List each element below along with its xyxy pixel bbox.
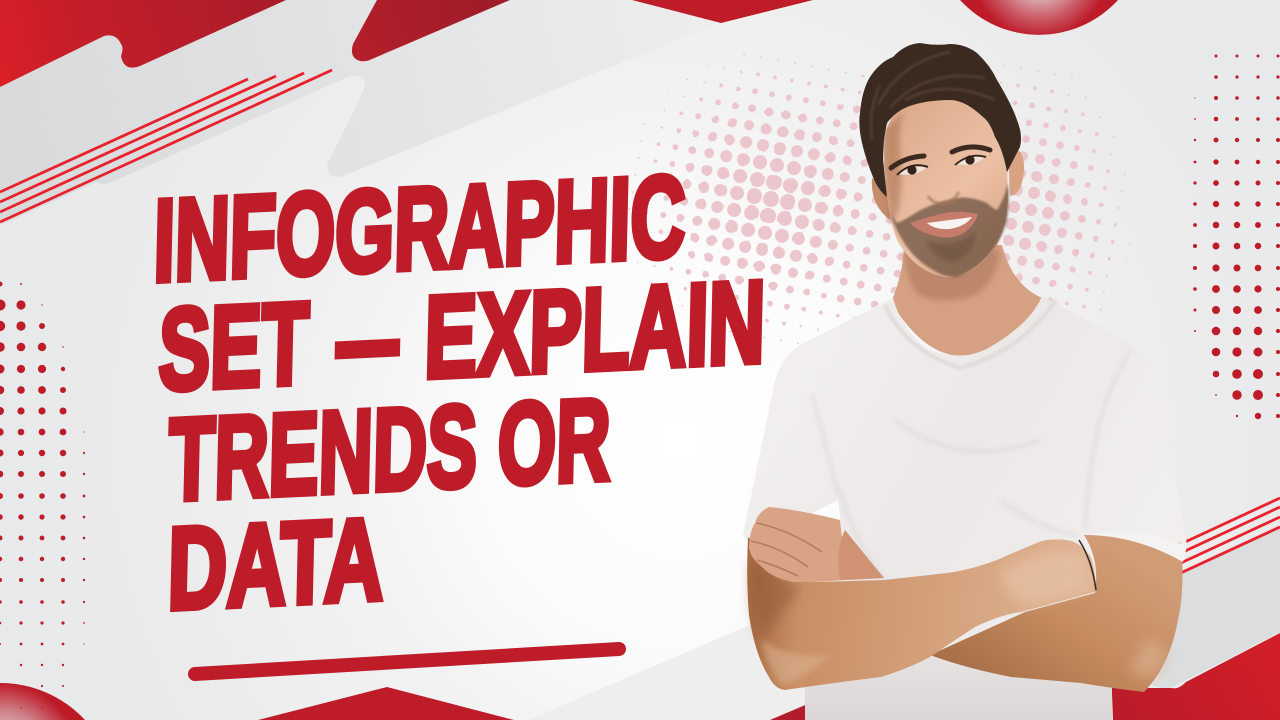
nose	[928, 192, 959, 204]
eyebrows	[891, 147, 990, 168]
chin stubble	[925, 232, 975, 262]
elbow shadow	[751, 560, 800, 640]
beard	[887, 183, 1009, 277]
title: EXPLAIN	[423, 256, 767, 402]
title: DATA	[166, 494, 385, 634]
title: —	[335, 274, 401, 407]
eyes	[897, 155, 986, 175]
background gray band bottom centre	[528, 625, 810, 720]
person: smiling man with crossed arms	[743, 43, 1187, 720]
red halftone dots right	[1193, 54, 1280, 419]
red chevron bottom centre	[258, 687, 514, 720]
face	[884, 92, 1008, 277]
red stripes bottom right	[1170, 498, 1280, 578]
title: TRENDS OR	[167, 374, 612, 525]
back arm	[930, 535, 1182, 692]
neck shadow	[904, 250, 1000, 300]
red sliver bottom	[770, 703, 810, 720]
red shape top-left	[0, 0, 286, 87]
t-shirt	[743, 296, 1187, 720]
pink halftone pattern behind person	[623, 51, 1133, 365]
background gray band bottom right	[1150, 525, 1280, 688]
title: INFOGRAPHIC	[152, 151, 687, 306]
red shape bottom right	[1100, 633, 1280, 720]
smile	[910, 212, 978, 238]
red stripes top-left	[0, 70, 332, 222]
red chevron top centre	[632, 0, 813, 23]
left elbow highlight	[762, 640, 830, 684]
title: SET	[157, 278, 310, 415]
red shape top centre-left	[352, 0, 510, 61]
arm contact shadow	[1079, 540, 1096, 590]
back elbow highlight	[1130, 640, 1166, 676]
right sleeve cuff	[1085, 532, 1187, 562]
hair	[859, 43, 1021, 197]
title	[152, 151, 767, 634]
underline bar	[195, 649, 619, 674]
face side shadow	[884, 110, 905, 225]
red sphere top right	[960, 0, 1118, 35]
forearm highlight	[1000, 552, 1087, 605]
red halftone dots left	[0, 282, 85, 709]
ears	[872, 149, 1024, 220]
background gray band top-left	[0, 0, 775, 225]
front arm	[747, 537, 1096, 690]
hand	[749, 507, 884, 582]
hair highlights	[871, 52, 995, 140]
neck	[891, 245, 1042, 356]
red sphere bottom left	[0, 683, 85, 720]
